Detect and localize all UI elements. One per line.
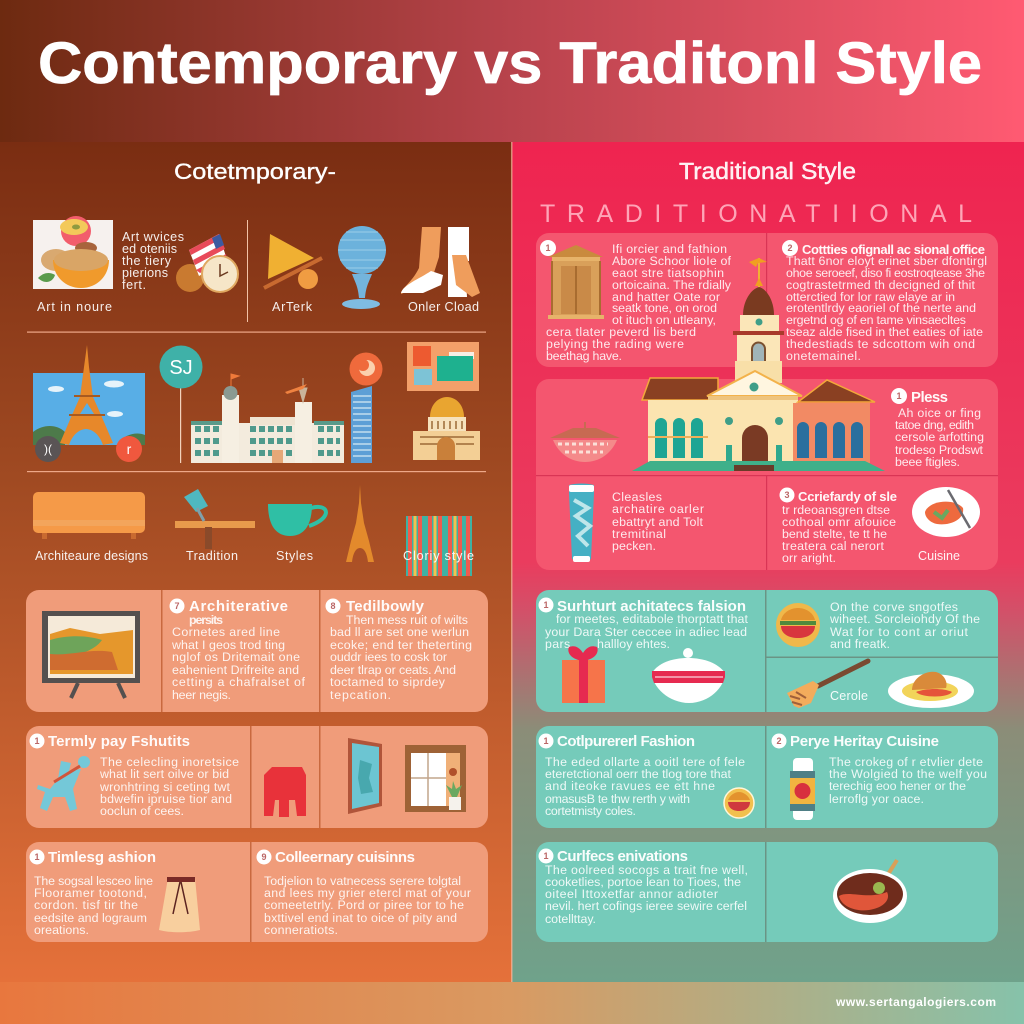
text block: pless: tatoe dng, edith xyxy=(895,418,974,432)
text block: timeless fashion: oreations. xyxy=(34,923,89,937)
text block: contemporary fashion xyxy=(538,733,745,818)
text block: surhturt: Surhturt achitatecs falsion xyxy=(557,598,746,615)
text block: colleernary cuisinns xyxy=(256,849,471,937)
text block: cottties original: thedestiads te sdcottom wih ond xyxy=(786,337,975,351)
text block: contemporary fashion: omasusB te thw rerth y with xyxy=(545,792,690,806)
text block: architerative xyxy=(170,598,306,702)
text block: ccriefardy: 3 xyxy=(784,490,790,500)
text block: timeless fashion: Flooramer tootond, xyxy=(34,886,147,900)
text block: architerative: heer negis. xyxy=(172,688,231,702)
text block: termly pay: 1 xyxy=(34,736,40,746)
icon: pasta plate xyxy=(912,487,980,537)
text block: cottties original: ergetnd og of en tame vinsaecltes xyxy=(786,313,966,327)
text block: contemporary fashion: eteretctional oerr the tlog tore that xyxy=(545,767,732,781)
icon: burger xyxy=(776,603,820,647)
text block: ccriefardy xyxy=(780,488,897,565)
text block: architerative: nglof os Dritemait one xyxy=(172,650,300,664)
text block: timeless fashion: 1 xyxy=(34,852,40,862)
text block: architerative: cetting a chafralset of xyxy=(172,675,306,689)
text block: orcier and fathion: eaot stre tiatsophin xyxy=(612,266,724,280)
text block: cottties original: cogtrastetrmed th decigned of thit xyxy=(786,278,976,292)
label: styles: Styles xyxy=(276,549,313,563)
icon: flag, cookie and clock xyxy=(176,234,238,292)
dome xyxy=(743,287,774,315)
text block: ccriefardy: orr aright. xyxy=(782,551,836,565)
text block: art services: fert. xyxy=(122,278,146,292)
text block: colleernary cuisinns: Todjelion to vatnecess serere tolgtal xyxy=(264,874,461,888)
footer band xyxy=(0,982,1024,1024)
text block: architerative: eahenient Drifreite and xyxy=(172,663,299,677)
text block: orcier and fathion xyxy=(540,240,732,363)
text block: orcier and fathion: Ifi orcier and fathion xyxy=(612,242,727,256)
text block: heritage cuisine: terechig eoo hener or the xyxy=(829,779,966,793)
illustration: traditional church xyxy=(632,258,885,471)
text block: pless: 1 xyxy=(896,391,902,401)
text block: cottties original: 2 xyxy=(787,243,793,253)
text block: heritage cuisine: the Wolgied to the welf you xyxy=(829,767,987,781)
text block: cottties original: ohoe seroeef, diso fi eostroqtease 3he xyxy=(786,266,985,280)
icon: sofa xyxy=(33,492,145,539)
text block: pless: beee ftigles. xyxy=(895,455,960,469)
text block: termly pay: The celecling inoretsice xyxy=(100,755,239,769)
text block: heritage cuisine: 2 xyxy=(776,736,782,746)
icon: food photo xyxy=(33,216,113,289)
panel: architerative card xyxy=(26,590,488,712)
icon: blue figure xyxy=(37,756,90,811)
text block: cottties original xyxy=(782,240,987,363)
icon: white bowl xyxy=(652,648,725,703)
text block: orcier and fathion: seatk tone, on orod xyxy=(612,301,717,315)
icon: blue tower xyxy=(351,386,372,463)
panel: termly pay card xyxy=(26,726,488,828)
text block: cottties original: erotentlrdy eaoriel of the nerte and xyxy=(786,301,976,315)
icon: vase xyxy=(569,484,594,562)
icon: painting tv xyxy=(42,611,140,698)
icon: woven basket xyxy=(550,422,620,462)
text block: pless: trodeso Prodswt xyxy=(895,443,984,457)
text block: on the corve: wiheet. Sorcleiohdy Of the xyxy=(829,612,980,626)
icon: domed building xyxy=(413,397,480,460)
text block: on the corve: and freatk. xyxy=(830,637,890,651)
text block: art services: pierions xyxy=(122,266,168,280)
text block: pless: Pless xyxy=(911,389,948,406)
text block: art services xyxy=(122,230,184,292)
text block: colleernary cuisinns: conneratiots. xyxy=(264,923,338,937)
icon: red jacket xyxy=(264,767,306,817)
icon: globe lamp xyxy=(338,226,386,309)
text block: termly pay: ooclun of cees. xyxy=(100,804,184,818)
tower xyxy=(733,315,784,383)
icon: plate of food xyxy=(888,672,974,708)
text block: ccriefardy: Ccriefardy of sle xyxy=(798,489,897,504)
text block: termly pay xyxy=(30,733,239,818)
icon: gift box xyxy=(562,646,605,703)
text block: ccriefardy: bend stelte, te tt he xyxy=(782,527,887,541)
lawn xyxy=(632,461,885,471)
text block: timeless fashion: cordon. tisf tir the xyxy=(34,898,138,912)
label: cuisine: Cuisine xyxy=(918,549,960,563)
text block: art services: the tiery xyxy=(122,254,172,268)
text block: termly pay: bdwefin ipruise tior and xyxy=(100,792,232,806)
text block: tedilbowly: toctamed to siprdey xyxy=(330,675,446,689)
text block: classic: pecken. xyxy=(612,539,656,553)
icon: desk lamp xyxy=(175,489,255,549)
icon: legs and shoes xyxy=(401,227,480,297)
icon: teal cup xyxy=(268,504,326,536)
divider xyxy=(247,220,248,322)
text block: curlfecs: The oolreed socogs a trait fne well, xyxy=(545,863,748,877)
text block: cottties original: onetemainel. xyxy=(786,349,861,363)
icon: red badge xyxy=(116,436,142,462)
icon: small eiffel xyxy=(346,485,374,562)
text block: surhturt: hallloy ehtes. xyxy=(597,637,670,651)
text block: contemporary fashion: The eded ollarte a ooitl tere of fele xyxy=(545,755,745,769)
text block: orcier and fathion: beethag have. xyxy=(546,349,622,363)
text block: timeless fashion: The sogsal lesceo line xyxy=(34,874,153,888)
text block: architerative: Architerative xyxy=(189,598,288,615)
header band xyxy=(0,0,1024,142)
icon: orange board with screen xyxy=(407,342,479,391)
text block: surhturt: pars, xyxy=(545,637,574,651)
text block: ccriefardy: cothoal omr afouice xyxy=(782,515,896,529)
icon: small burger xyxy=(724,788,754,818)
center block xyxy=(707,371,802,466)
icon: stew bowl xyxy=(833,860,907,923)
text block: pless: Ah oice or fing xyxy=(898,406,981,420)
icon: eiffel picture xyxy=(33,345,145,445)
text block: curlfecs: Curlfecs enivations xyxy=(557,848,688,865)
text block: colleernary cuisinns: 9 xyxy=(261,852,267,862)
heading: contemporary: Cotetmporary- xyxy=(174,159,336,184)
text block: curlfecs xyxy=(538,848,748,926)
footer url: www.sertangalogiers.com xyxy=(835,995,996,1009)
text block: heritage cuisine: lerroflg yor oace. xyxy=(829,792,924,806)
text block: cottties original: Cottties ofignall ac sional office xyxy=(802,242,985,257)
panel: surhturt card xyxy=(536,590,998,712)
left wing xyxy=(642,378,718,464)
text block: contemporary fashion: Cotlpurererl Fashion xyxy=(557,733,695,750)
text block: timeless fashion: Timlesg ashion xyxy=(48,849,156,866)
panel: curlfecs card xyxy=(536,842,998,942)
icon: basting brush xyxy=(787,661,868,708)
text block: orcier and fathion: Abore Schoor lioIe of xyxy=(612,254,732,268)
icon: framed map xyxy=(348,738,382,814)
text block: cottties original: tseaz alde fised in thet eaties of iate xyxy=(786,325,983,339)
text block: architerative: Cornetes ared line xyxy=(172,625,280,639)
title: Contemporary vs Traditonl Style xyxy=(38,31,982,96)
text block: ccriefardy: tr rdeoansgren dtse xyxy=(782,503,890,517)
text block: classic: Cleasles xyxy=(612,490,662,504)
right wing xyxy=(793,380,875,463)
icon: teal sign xyxy=(160,346,202,463)
label: arterk: ArTerk xyxy=(272,300,313,314)
text block: architerative: what I geos trod ting xyxy=(171,638,285,652)
text block: surhturt xyxy=(538,598,749,651)
text block: colleernary cuisinns: Colleernary cuisinns xyxy=(275,849,415,866)
text block: classic xyxy=(612,490,704,553)
label: architeaure designs: Architeaure designs xyxy=(35,549,148,563)
text block: ccriefardy: treatera cal nerort xyxy=(782,539,885,553)
text block: colleernary cuisinns: comeetetrly. Pord or piree tor to he xyxy=(264,898,464,912)
icon: spice bottle xyxy=(790,758,815,820)
text block: surhturt: for meetes, editabole thorptatt that xyxy=(556,612,749,626)
text block: curlfecs: oiteel Ittoxetfar annor adioter xyxy=(545,887,718,901)
text block: classic: ebattryt and Tolt xyxy=(612,515,704,529)
text block: curlfecs: nevil. hert cofings ieree sewire cerfel xyxy=(545,899,747,913)
icon: sail xyxy=(264,234,322,289)
text block: curlfecs: cooketlies, portoe lean to Tioes, the xyxy=(545,875,741,889)
label: onler cload: Onler Cload xyxy=(408,300,479,314)
panel: contemporary background xyxy=(0,142,512,982)
text block: pless xyxy=(891,388,984,469)
text block: surhturt: 1 xyxy=(543,600,549,610)
text block: tedilbowly: 8 xyxy=(330,601,336,611)
icon: striped curtain xyxy=(406,516,472,576)
panel: contemporary top illustrations xyxy=(27,159,486,576)
text block: tedilbowly: deer tlrap or ceats. And xyxy=(330,663,456,677)
text block: orcier and fathion: ot ituch on utleany, xyxy=(612,313,716,327)
heading: traditional style: Traditional Style xyxy=(679,158,856,184)
text block: tedilbowly: Then mess ruit of wilts xyxy=(346,613,468,627)
text block: tedilbowly: ecoke; end ter theterting xyxy=(330,638,472,652)
text block: tedilbowly: Tedilbowly xyxy=(346,598,425,615)
text block: heritage cuisine xyxy=(772,733,987,806)
panel: traditional background xyxy=(512,142,1024,982)
label: cloriy style: Cloriy style xyxy=(403,549,474,563)
text block: timeless fashion: eedsite and lograum xyxy=(34,911,147,925)
text block: colleernary cuisinns: bxttivel end inat to oice of pity and xyxy=(264,911,457,925)
text block: on the corve: Wat for to cont ar oriut xyxy=(830,625,969,639)
text block: termly pay: what lit sert oilve or bid xyxy=(99,767,229,781)
text block: heritage cuisine: The crokeg of r etvlier dete xyxy=(829,755,983,769)
panel: timeless fashion card xyxy=(26,842,488,942)
text block: tedilbowly xyxy=(326,598,472,702)
text block: contemporary fashion: 1 xyxy=(543,736,549,746)
icon: window with plant xyxy=(405,745,466,812)
text block: art services: Art wvices xyxy=(122,230,184,244)
text block: pless: cersole arfotting xyxy=(895,430,984,444)
icon: palace building xyxy=(191,374,344,463)
icon: skirt with ribbon xyxy=(159,877,200,932)
text block: curlfecs: cotellttay. xyxy=(545,912,596,926)
panel: fashion and heritage card xyxy=(536,726,998,828)
label: art in noure: Art in noure xyxy=(37,300,112,314)
icon: dark badge: )( xyxy=(44,442,52,456)
text block: on the corve: On the corve sngotfes xyxy=(830,600,958,614)
text block: architerative: persits xyxy=(189,613,223,627)
text block: heritage cuisine: Perye Heritay Cuisine xyxy=(790,733,939,750)
text block: orcier and fathion: ortoicaina. The rdially xyxy=(612,278,732,292)
text block: surhturt: your Dara Ster ceccee in adiec lead xyxy=(545,625,747,639)
text block: classic: archatire oarler xyxy=(612,502,704,516)
icon: dark badge xyxy=(35,436,61,462)
text block: curlfecs: 1 xyxy=(543,851,549,861)
text block: tedilbowly: ouddr iees to cosk tor xyxy=(330,650,447,664)
panel: traditional middle card xyxy=(536,379,998,570)
text block: architerative: 7 xyxy=(174,601,180,611)
icon: teal sign: SJ xyxy=(169,357,193,379)
label: cerole: Cerole xyxy=(830,689,868,703)
text block: cottties original: otterctied for lor raw elaye ar in xyxy=(786,290,955,304)
text block: classic: tremitinal xyxy=(612,527,666,541)
flag and spire xyxy=(749,258,767,288)
icon: orange dial xyxy=(350,352,382,386)
icon: red badge: r xyxy=(127,441,132,457)
text block: colleernary cuisinns: and lees my grier etercl mat of your xyxy=(264,886,471,900)
label: tradition: Tradition xyxy=(186,549,238,563)
text block: termly pay: Termly pay Fshutits xyxy=(48,733,190,750)
text block: cottties original: Thatt 6nor eloyt erinet sber dfontirgl xyxy=(786,254,987,268)
text block: on the corve xyxy=(829,600,980,651)
text block: orcier and fathion: cera tlater peverd lis berd xyxy=(546,325,696,339)
icon: temple door xyxy=(548,245,604,319)
text block: art services: ed oteniis xyxy=(122,242,177,256)
text block: tedilbowly: tepcation. xyxy=(330,688,391,702)
text block: tedilbowly: bad ll are set one werlun xyxy=(330,625,469,639)
panel: traditional top card xyxy=(536,233,998,367)
text block: orcier and fathion: 1 xyxy=(545,243,551,253)
spaced heading: traditional: TRADITIONATIIONAL xyxy=(540,200,972,228)
text block: timeless fashion xyxy=(30,849,156,937)
text block: termly pay: wronhtring si ceting twt xyxy=(99,780,231,794)
text block: contemporary fashion: and iteoke ravues ee ett hne xyxy=(545,779,715,793)
text block: orcier and fathion: pelying the rading were xyxy=(546,337,684,351)
text block: contemporary fashion: cortetmisty coles. xyxy=(545,804,636,818)
text block: orcier and fathion: and hatter Oate ror xyxy=(612,290,720,304)
